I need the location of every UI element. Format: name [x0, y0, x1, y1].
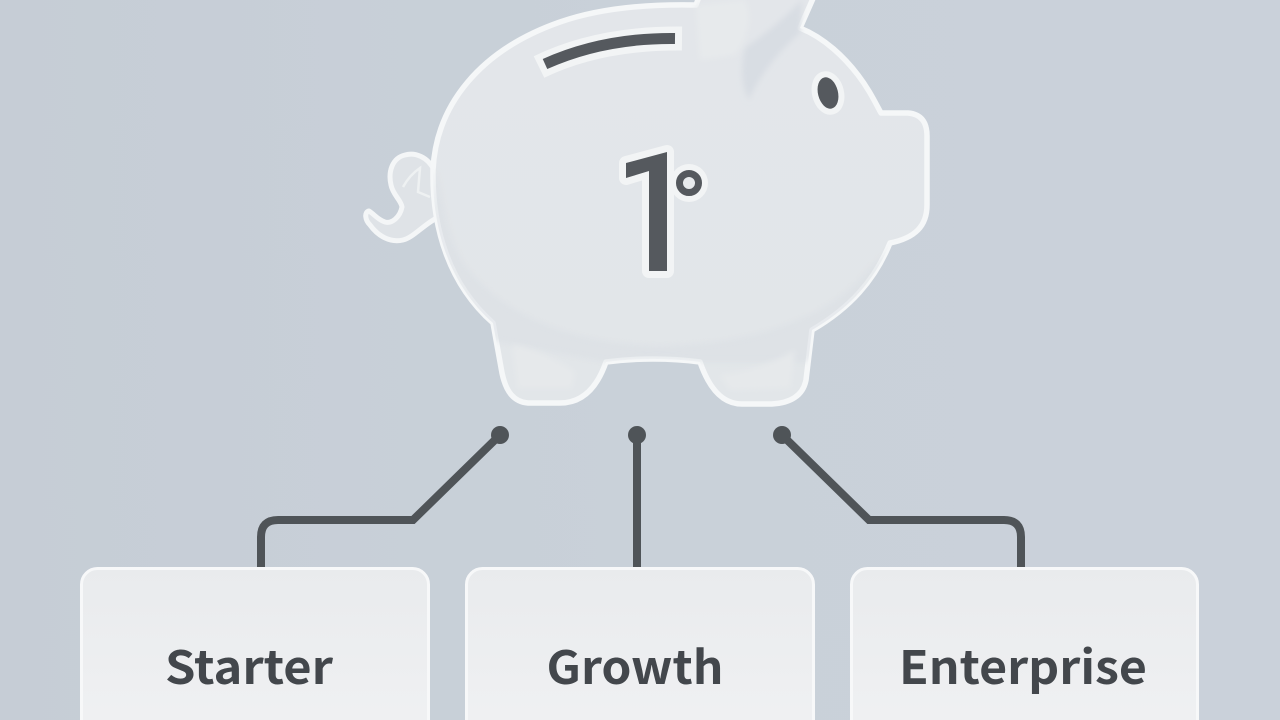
card: Enterprise	[852, 568, 1198, 720]
body lower shading	[430, 0, 900, 390]
card: Growth	[466, 568, 814, 720]
piggy bank illustration	[366, 0, 927, 404]
coin slot	[539, 38, 682, 67]
pig body	[433, 0, 927, 404]
pig tail	[366, 154, 445, 241]
connector: growth	[628, 426, 646, 567]
label: 1 degree	[626, 152, 708, 271]
label: Starter: Starter	[165, 632, 334, 698]
connector: starter	[261, 426, 509, 567]
feet highlights	[512, 345, 575, 388]
label: Growth: Growth	[546, 632, 724, 698]
ear shading	[744, 8, 802, 92]
connector: enterprise	[773, 426, 1021, 567]
card: Starter	[82, 568, 428, 720]
eye	[814, 75, 842, 111]
connector lines	[261, 426, 1021, 567]
label: Enterprise: Enterprise	[899, 632, 1147, 698]
